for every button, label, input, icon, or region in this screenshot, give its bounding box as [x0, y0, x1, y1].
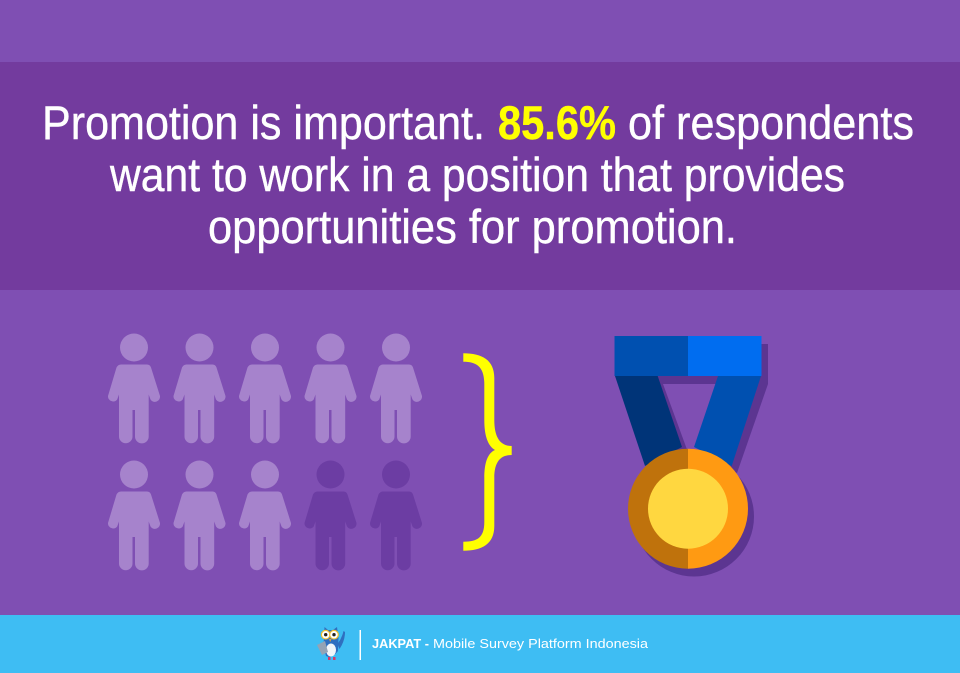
- headline text: 85.6%: [498, 96, 616, 149]
- headline text: Promotion is important.: [42, 96, 485, 149]
- headline text: [42, 96, 914, 253]
- people pictogram: 10 figures, 8 highlighted: [108, 334, 422, 570]
- headline band: [0, 62, 960, 290]
- footer text: JAKPAT -: [372, 636, 429, 651]
- yellow curly brace: [463, 353, 512, 551]
- headline text: want to work in a position that provides: [109, 148, 845, 201]
- footer text: Mobile Survey Platform Indonesia: [433, 636, 649, 651]
- divider: [360, 630, 361, 660]
- icon: owl mascot: [317, 627, 345, 660]
- footer bar: [0, 615, 960, 673]
- icon: medal: [614, 336, 768, 576]
- headline text: of respondents: [628, 96, 914, 149]
- headline text: opportunities for promotion.: [208, 200, 737, 253]
